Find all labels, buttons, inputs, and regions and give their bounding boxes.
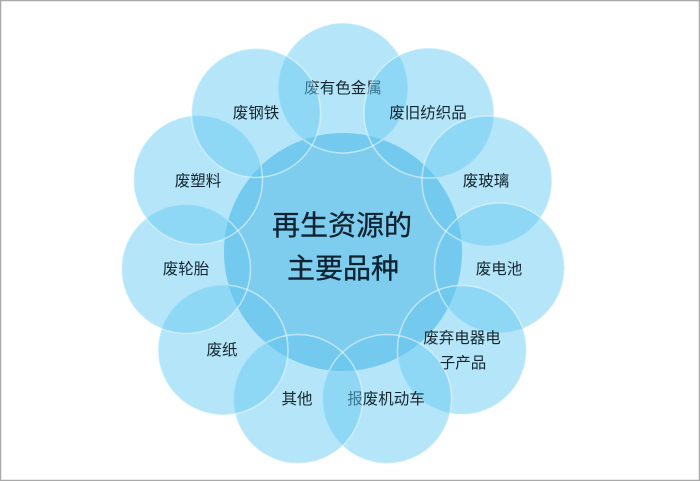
center title: 再生资源的 — [272, 210, 412, 241]
label: e-waste: 废弃电器电 — [423, 329, 501, 347]
petal: non-ferrous metal: 废有色金属 — [304, 79, 382, 97]
petal: glass: 废玻璃 — [463, 172, 509, 190]
petal: waste paper — [158, 285, 288, 415]
petal: other — [234, 334, 362, 464]
center title: 主要品种 — [287, 253, 399, 284]
petal: tires: 废轮胎 — [163, 260, 209, 278]
petal: waste paper: 废纸 — [206, 341, 238, 359]
label: e-waste: 子产品 — [440, 354, 486, 372]
petal: tires — [122, 204, 250, 334]
center title — [272, 210, 412, 284]
petal: non-ferrous metal — [278, 23, 408, 153]
petal: plastics — [134, 116, 262, 244]
petal: scrapped vehicles: 报废机动车 — [347, 390, 425, 408]
petal: e-waste — [398, 286, 526, 414]
petal: glass — [422, 116, 552, 246]
label: e-waste — [423, 329, 501, 372]
petal: plastics: 废塑料 — [175, 172, 221, 190]
petal: batteries — [434, 203, 564, 333]
petal: batteries: 废电池 — [476, 260, 522, 278]
petal: scrapped vehicles — [322, 334, 452, 464]
petal: steel: 废钢铁 — [233, 104, 279, 122]
petal: steel — [192, 48, 320, 178]
petal: old textiles — [364, 48, 494, 178]
center circle: main varieties — [224, 133, 462, 371]
petal: other: 其他 — [281, 390, 313, 408]
petal: old textiles: 废旧纺织品 — [389, 104, 467, 122]
